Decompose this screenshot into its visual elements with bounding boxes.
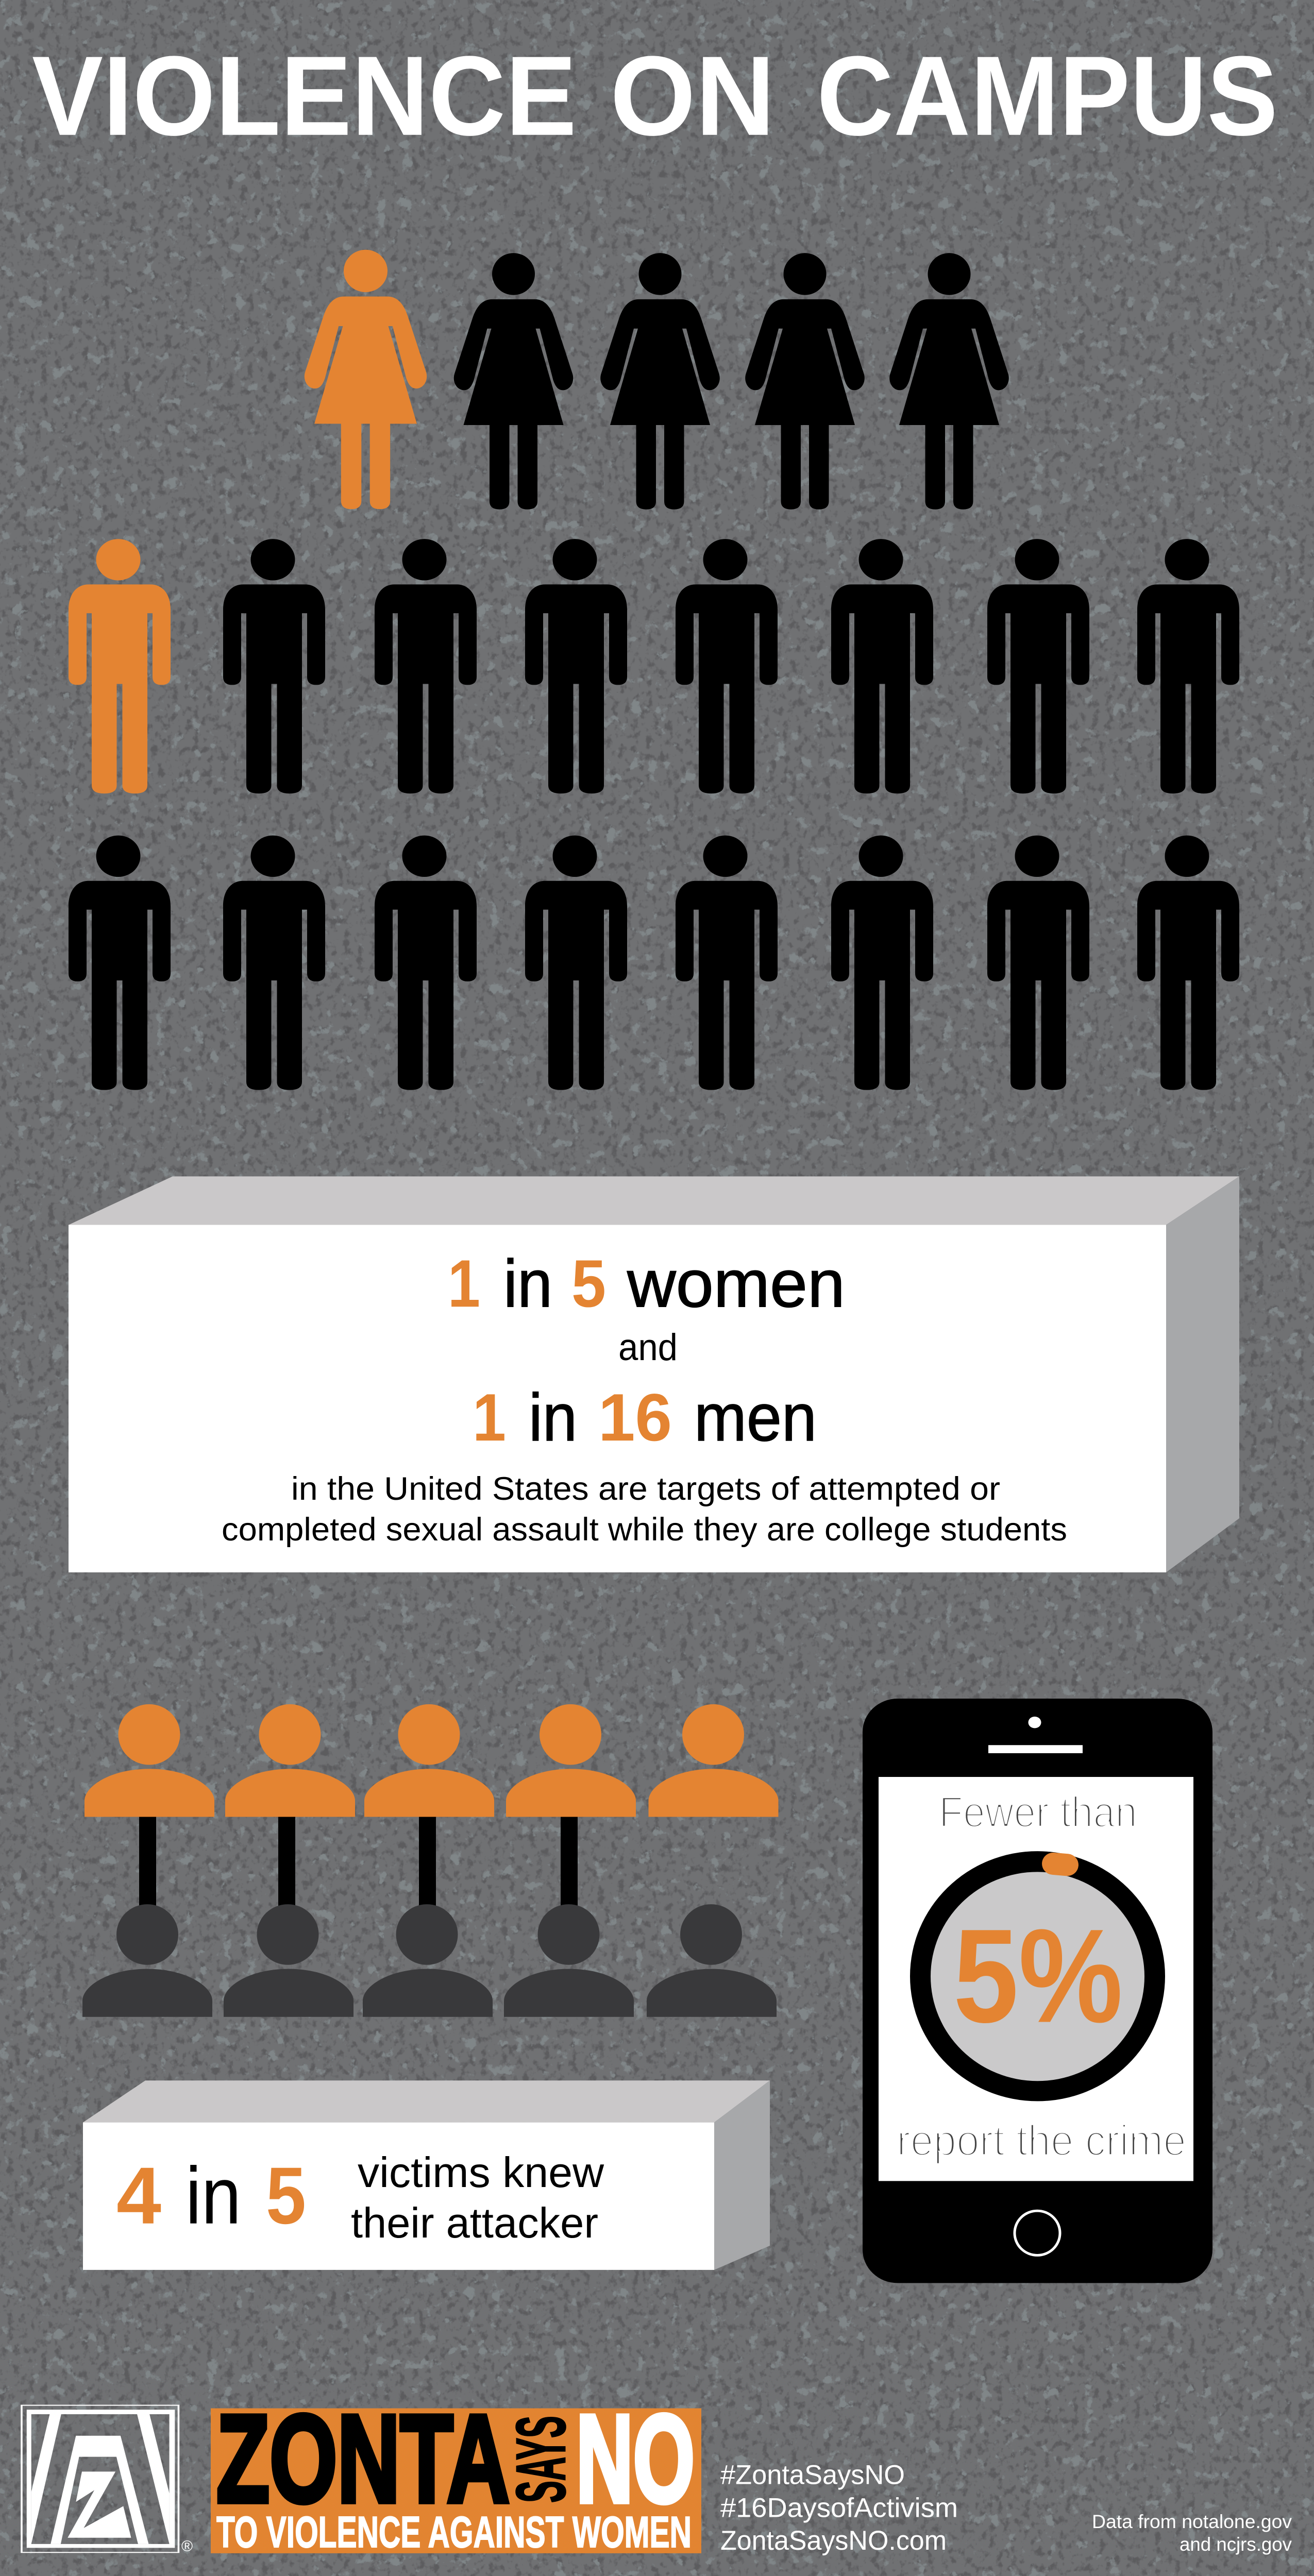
text: NO: NO bbox=[576, 2389, 695, 2528]
text: data sources: and ncjrs.gov bbox=[1180, 2533, 1292, 2555]
text: and: and bbox=[618, 1326, 678, 1368]
stat line: 1 in 5 women: 5 bbox=[571, 1246, 606, 1321]
connector poles bbox=[139, 1817, 578, 1910]
title: ON bbox=[610, 33, 775, 159]
title: CAMPUS bbox=[817, 33, 1278, 159]
stat line: 1 in 16 men: in bbox=[529, 1380, 577, 1455]
stat line: 1 in 5 women: 1 bbox=[448, 1246, 480, 1321]
text: hashtags and website: #ZontaSaysNO bbox=[720, 2460, 905, 2490]
text: hashtags and website: ZontaSaysNO.com bbox=[720, 2526, 947, 2556]
icon: smartphone with 5% stat bbox=[863, 1699, 1212, 2283]
stat line: 1 in 16 men: 16 bbox=[598, 1380, 672, 1455]
woman black 2 bbox=[454, 253, 573, 510]
stat: 4 in 5: in bbox=[186, 2150, 241, 2241]
text: to violence against women: TO VIOLENCE AGAINST WOMEN bbox=[216, 2508, 692, 2557]
stat line: 1 in 5 women: women bbox=[627, 1246, 845, 1321]
woman black 5 bbox=[889, 253, 1009, 510]
stat line: 1 in 16 men: men bbox=[694, 1380, 817, 1455]
title bbox=[32, 33, 1278, 159]
banner: Zonta says no: SAYS bbox=[502, 2416, 580, 2503]
text: fewer than: Fewer than bbox=[939, 1788, 1137, 1837]
text: report the crime: report the crime bbox=[897, 2116, 1186, 2165]
stat line: 1 in 16 men: 1 bbox=[473, 1380, 506, 1455]
stat line: 1 in 16 men bbox=[473, 1380, 817, 1455]
description text: in the United States are targets of attempted or bbox=[291, 1471, 1000, 1507]
text: victims knew their attacker bbox=[351, 2149, 604, 2247]
banner: Zonta says no bbox=[211, 2389, 701, 2557]
stat line: 1 in 5 women: in bbox=[503, 1246, 552, 1321]
logo: Zonta emblem: ® bbox=[181, 2538, 193, 2555]
text: data sources: Data from notalone.gov bbox=[1092, 2511, 1292, 2532]
man highlighted orange bbox=[69, 539, 171, 793]
victims row bbox=[85, 1704, 778, 1817]
panel: statistics box bbox=[69, 1176, 1239, 1572]
stat: 4 in 5: 4 bbox=[116, 2150, 161, 2241]
stat line: 1 in 5 women bbox=[448, 1246, 845, 1321]
logo: Zonta emblem bbox=[21, 2405, 193, 2555]
text: hashtags and website: #16DaysofActivism bbox=[720, 2493, 958, 2523]
text: victims knew their attacker: victims knew bbox=[358, 2149, 604, 2196]
men row 1: first highlighted bbox=[69, 539, 1239, 793]
text: data sources bbox=[1092, 2511, 1292, 2555]
ring chart: 5 percent: 5% bbox=[953, 1902, 1123, 2050]
text: ZONTA: ZONTA bbox=[216, 2389, 510, 2528]
text: hashtags and website bbox=[720, 2460, 958, 2556]
women row: 1 in 5 bbox=[305, 250, 1009, 510]
stat: 4 in 5: 5 bbox=[266, 2150, 306, 2241]
men row 2 bbox=[69, 836, 1239, 1090]
panel: 4 in 5 box bbox=[83, 2080, 770, 2270]
text: victims knew their attacker: their attacker bbox=[351, 2199, 598, 2247]
title: VIOLENCE bbox=[32, 33, 577, 159]
description text bbox=[222, 1471, 1067, 1548]
woman black 4 bbox=[745, 253, 865, 510]
description text: completed sexual assault while they are college students bbox=[222, 1512, 1067, 1548]
stat: 4 in 5 bbox=[116, 2150, 306, 2241]
woman black 3 bbox=[600, 253, 720, 510]
ring chart: 5 percent bbox=[910, 1851, 1165, 2101]
attackers row bbox=[82, 1904, 777, 2017]
diagram: victims connected to attackers bbox=[82, 1704, 778, 2017]
woman highlighted orange bbox=[305, 250, 427, 509]
